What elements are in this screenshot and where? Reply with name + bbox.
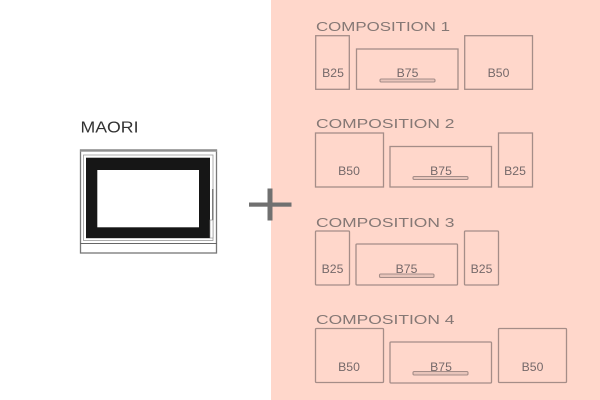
module: B25 <box>464 231 498 285</box>
module: B75 <box>390 342 492 383</box>
composition 2 <box>316 117 532 187</box>
module: B75 <box>356 244 458 285</box>
module: B50 <box>465 36 532 89</box>
module: B75: B75 <box>430 164 452 178</box>
module: B75: B75 <box>396 262 418 276</box>
module: B50: B50 <box>338 164 360 178</box>
module: B25 <box>498 133 532 187</box>
module: B25: B25 <box>471 262 493 276</box>
module: B50: B50 <box>488 66 510 80</box>
module: B25: B25 <box>322 66 344 80</box>
module: B25 <box>316 36 349 89</box>
module: B50 <box>498 328 566 382</box>
icon: Maori stove <box>80 150 217 253</box>
module: B75 <box>390 146 492 187</box>
module: B25: B25 <box>322 262 344 276</box>
heading: composition 4: COMPOSITION 4 <box>316 313 455 327</box>
module: B25 <box>316 231 350 285</box>
composition 1 <box>316 20 532 89</box>
module: B50 <box>316 133 384 187</box>
module: B50: B50 <box>338 360 360 374</box>
composition 3 <box>316 216 498 285</box>
module: B50: B50 <box>522 360 544 374</box>
heading: composition 3: COMPOSITION 3 <box>316 216 455 230</box>
module: B75 <box>356 49 458 89</box>
icon: plus sign <box>249 188 292 220</box>
panel: compositions background <box>271 0 600 400</box>
module: B50 <box>316 328 384 382</box>
module: B75: B75 <box>397 66 419 80</box>
heading: composition 2: COMPOSITION 2 <box>316 117 455 131</box>
module: B25: B25 <box>504 164 526 178</box>
artwork <box>80 20 566 383</box>
heading: MAORI: MAORI <box>80 120 138 136</box>
heading: composition 1: COMPOSITION 1 <box>316 20 450 34</box>
composition 4 <box>316 313 566 383</box>
module: B75: B75 <box>430 360 452 374</box>
